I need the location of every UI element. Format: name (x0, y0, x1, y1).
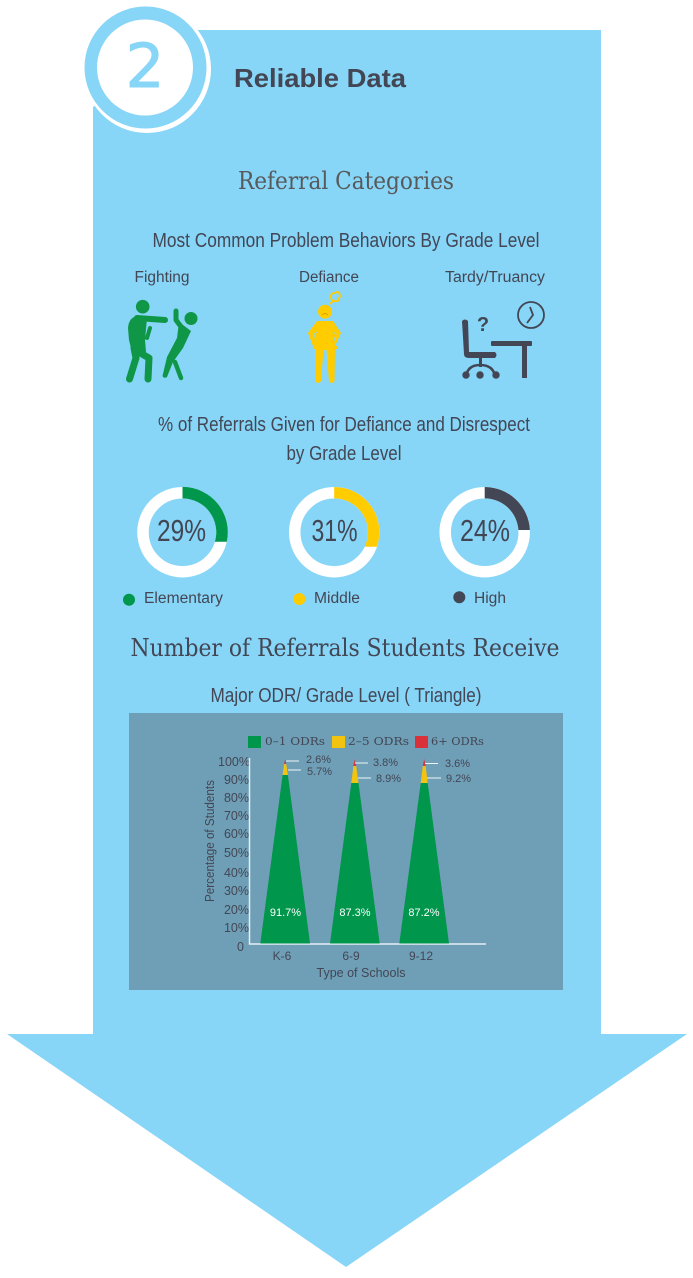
label: Defiance: Defiance (299, 269, 359, 286)
y axis labels: 10% (224, 921, 249, 935)
axes (250, 758, 486, 944)
icon: empty desk with clock (462, 302, 544, 379)
callout values: 9.2% (446, 773, 471, 785)
subheading: percent of referrals: % of Referrals Given for Defiance and Disrespect (158, 414, 530, 436)
y axis title: Percentage of Students (203, 780, 217, 902)
icon: empty desk with clock: ? (477, 314, 489, 336)
donut: elementary 29% (143, 487, 228, 572)
number badge: 2 (126, 31, 164, 102)
triangle 6-9 (330, 759, 380, 944)
legend: Elementary: Elementary (144, 590, 223, 607)
icon: fighting figures (128, 300, 198, 379)
label: Fighting: Fighting (134, 269, 190, 286)
y axis labels: 100% (218, 755, 250, 769)
y axis labels: 70% (224, 809, 249, 823)
category labels (273, 949, 433, 963)
chart legend: 0–1 ODRs (265, 735, 325, 748)
heading: Referral Categories: Referral Categories (238, 167, 454, 195)
legend: High (453, 590, 506, 607)
chart legend: 6+ ODRs (431, 735, 484, 748)
y axis labels: 0 (237, 940, 244, 954)
y axis labels: 80% (224, 791, 249, 805)
donut: middle 31% (295, 487, 379, 572)
donut: high 24%: 24% (460, 513, 510, 548)
callout values: 3.6% (445, 758, 470, 770)
callout values: 2.6% (306, 754, 331, 766)
y axis labels: 20% (224, 903, 249, 917)
chart panel (129, 713, 563, 990)
callout values (306, 754, 471, 785)
triangle 6-9: 87.3% (339, 907, 371, 919)
chart legend: 2–5 ODRs (348, 735, 409, 748)
y axis labels: 60% (224, 827, 249, 841)
callout lines (286, 761, 441, 778)
callout values: 5.7% (307, 766, 332, 778)
y axis labels: 30% (224, 884, 249, 898)
triangle 9-12 (399, 759, 449, 944)
y axis labels (218, 755, 250, 954)
y axis labels: 40% (224, 866, 249, 880)
subheading: percent of referrals (158, 414, 530, 465)
icon: defiant figure (308, 292, 341, 383)
category labels: 9-12 (409, 949, 433, 963)
subheading: problem behaviors: Most Common Problem Behaviors By Grade Level (152, 230, 540, 252)
triangle K-6: 91.7% (270, 907, 301, 919)
triangle 9-12: 87.2% (408, 907, 440, 919)
x axis title: Type of Schools (316, 966, 406, 980)
legend: Middle (293, 590, 360, 607)
donut: middle 31%: 31% (312, 513, 358, 548)
donut: elementary 29%: 29% (157, 513, 206, 548)
heading: number of referrals: Number of Referrals Students Receive (130, 634, 560, 662)
category labels: K-6 (273, 949, 292, 963)
chart legend (248, 735, 484, 748)
subheading: major ODR: Major ODR/ Grade Level ( Triangle) (210, 685, 482, 707)
triangle K-6 (260, 759, 310, 944)
label: Tardy/Truancy: Tardy/Truancy (445, 269, 545, 286)
heading: Reliable Data: Reliable Data (234, 63, 407, 93)
category labels: 6-9 (342, 949, 360, 963)
callout values: 8.9% (376, 773, 401, 785)
legend: Middle: Middle (314, 590, 360, 607)
y axis labels: 50% (224, 846, 249, 860)
y axis labels: 90% (224, 773, 249, 787)
callout values: 3.8% (373, 757, 398, 769)
number badge (83, 5, 211, 133)
legend: High: High (474, 590, 506, 607)
subheading: percent of referrals: by Grade Level (286, 443, 402, 465)
donut: high 24% (445, 487, 530, 572)
